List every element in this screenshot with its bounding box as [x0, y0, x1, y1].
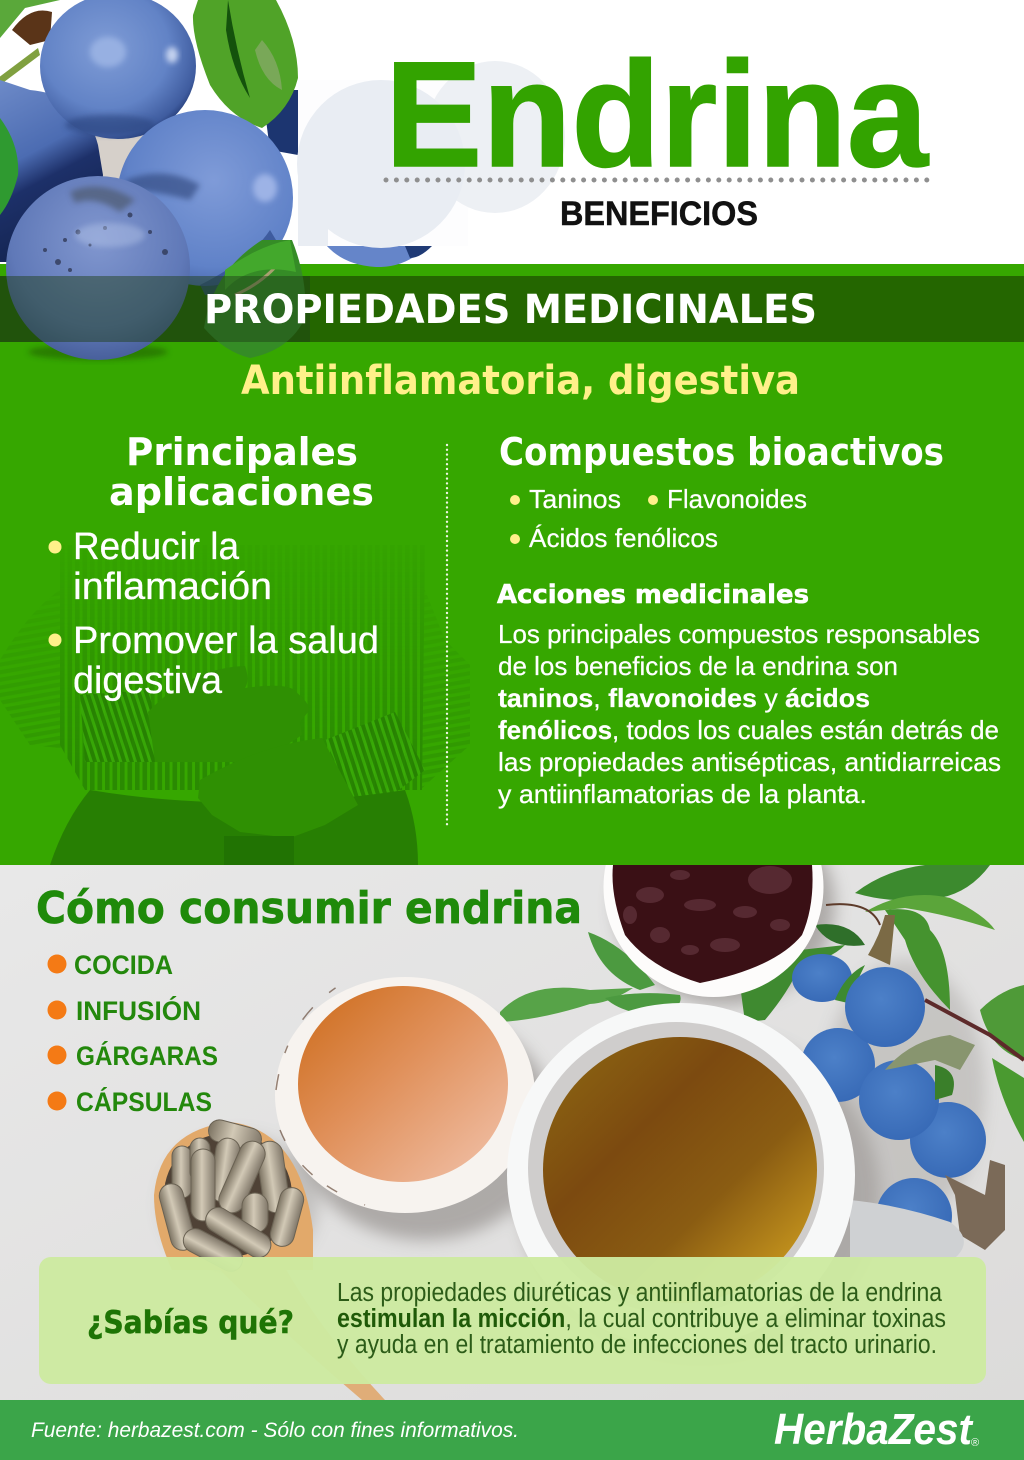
text block: medicinal actions: las propiedades antisépticas, antidiarreicas — [498, 747, 1001, 777]
spoon with capsules — [154, 1117, 385, 1400]
heading: main applications: aplicaciones — [109, 470, 374, 514]
list: consumption methods — [48, 950, 218, 1117]
column divider — [446, 445, 448, 828]
callout: did you know — [39, 1257, 986, 1384]
heading: main applications — [109, 430, 374, 514]
source text: Fuente: herbazest.com - Sólo con fines informativos. — [31, 1419, 519, 1442]
dotted title rule — [386, 178, 928, 182]
background: white header — [0, 0, 1024, 264]
footer bar — [0, 1400, 1024, 1460]
photo: torso with hands, tinted — [0, 587, 470, 865]
berries — [792, 954, 1005, 1254]
panel: dark banner — [0, 276, 1024, 342]
text block: medicinal actions: de los beneficios de la endrina son — [498, 651, 898, 681]
banner heading: PROPIEDADES MEDICINALES — [204, 287, 817, 333]
faded plums behind title — [297, 61, 565, 248]
heading: main applications: Principales — [126, 430, 358, 474]
shadows — [264, 865, 990, 1257]
bullet list: compounds: Taninos — [529, 484, 621, 514]
bullet list: compounds — [510, 484, 807, 553]
heading: bioactive compounds: Compuestos bioactivos — [499, 430, 944, 474]
photo: consumption still life — [154, 777, 1024, 1400]
panel: green properties section — [0, 264, 1024, 865]
text block: medicinal actions: taninos, flavonoides y ácidos — [498, 683, 870, 713]
text block: medicinal actions: Los principales compuestos responsables — [498, 619, 980, 649]
leaf: lower — [204, 240, 305, 358]
bullet list: compounds: Ácidos fenólicos — [529, 523, 718, 553]
list: consumption methods: INFUSIÓN — [76, 995, 201, 1026]
leaves and stems — [500, 865, 1024, 1142]
text block: medicinal actions: fenólicos, todos los cuales están detrás de — [498, 715, 999, 745]
bullet list: applications: inflamación — [73, 566, 272, 608]
panel: bioactive compounds — [497, 430, 1001, 809]
list: consumption methods: GÁRGARAS — [76, 1040, 218, 1071]
bullet list: applications: Promover la salud — [73, 620, 379, 662]
infusion cup — [275, 977, 535, 1213]
list: consumption methods: COCIDA — [74, 950, 173, 980]
panel: how to consume background — [0, 865, 1024, 1400]
photo: plums top left — [0, 0, 565, 360]
text block: medicinal actions — [498, 619, 1001, 809]
callout text: estimulan la micción, la cual contribuye a eliminar toxinas — [337, 1305, 946, 1333]
heading: how to consume: Cómo consumir endrina — [36, 883, 582, 934]
text block: medicinal actions: y antiinflamatorias de la planta. — [498, 779, 867, 809]
heading: medicinal actions: Acciones medicinales — [497, 580, 809, 610]
bullet list: applications — [48, 526, 379, 702]
jam bowl — [604, 865, 824, 997]
callout text: y ayuda en el tratamiento de infecciones del tracto urinario. — [337, 1331, 937, 1359]
faded plum base — [322, 240, 432, 267]
logo: HerbaZest: ® — [971, 1437, 979, 1449]
callout text: Las propiedades diuréticas y antiinflamatorias de la endrina — [337, 1279, 943, 1307]
bullet list: compounds: Flavonoides — [667, 484, 807, 514]
callout heading: ¿Sabías qué? — [87, 1305, 294, 1341]
tea cup — [507, 1003, 964, 1257]
properties subheading: Antiinflamatoria, digestiva — [241, 358, 800, 404]
callout text — [337, 1279, 946, 1359]
tint of banner over plums — [0, 276, 310, 342]
bullet list: applications: Reducir la — [73, 526, 240, 568]
leaf: upper — [193, 0, 298, 128]
panel: main applications — [48, 430, 379, 702]
logo: HerbaZest: HerbaZest — [774, 1405, 974, 1454]
bullet list: applications: digestiva — [73, 660, 223, 702]
list: consumption methods: CÁPSULAS — [76, 1086, 212, 1117]
subtitle: BENEFICIOS — [560, 195, 758, 233]
title: Endrina — [385, 30, 930, 198]
